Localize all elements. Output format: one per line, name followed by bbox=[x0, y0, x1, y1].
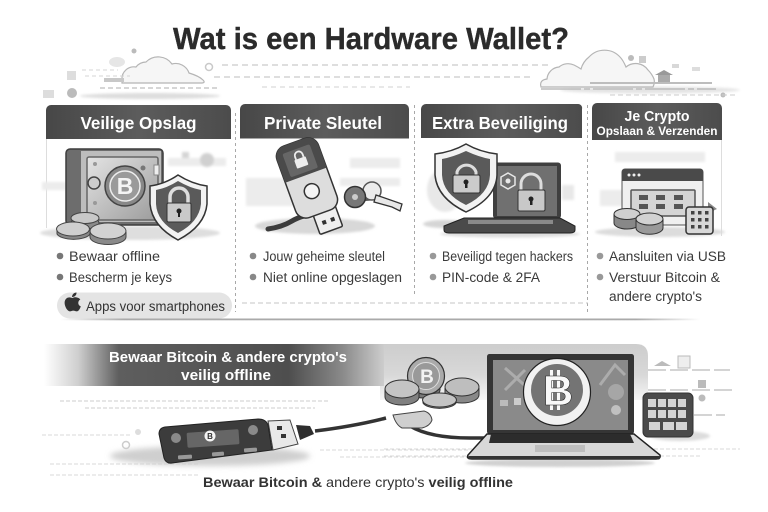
panel 4 bullets bbox=[597, 249, 726, 304]
icon: hardware key device bbox=[273, 135, 343, 235]
icon: shield with lock bbox=[435, 144, 497, 212]
panel 3 header bbox=[421, 104, 582, 138]
panel 3 header: Extra Beveiliging bbox=[432, 113, 568, 133]
icon: safe with bitcoin bbox=[66, 149, 163, 225]
icon: key cable bbox=[268, 212, 322, 229]
decoration: dashed lines under title bbox=[214, 65, 548, 87]
panel 3 bullets: Beveiligd tegen hackers bbox=[442, 249, 573, 264]
panel 2 bullets: Niet online opgeslagen bbox=[263, 270, 402, 285]
panel 1 bullets: Bescherm je keys bbox=[69, 270, 172, 285]
panel 4 header: Opslaan & Verzenden bbox=[596, 124, 718, 138]
laptop shadow bbox=[465, 459, 655, 467]
icon: laptop with lock bbox=[444, 162, 575, 233]
icon: coins bbox=[56, 212, 126, 245]
bottom background decoration bbox=[42, 356, 740, 475]
panel: Private Sleutel bbox=[240, 104, 409, 285]
panel 2 bullets: Jouw geheime sleutel bbox=[263, 249, 385, 264]
USB cable bbox=[315, 418, 484, 438]
icon: hardware wallet USB stick bbox=[159, 419, 314, 463]
panel 2 background decoration bbox=[246, 158, 400, 234]
panel: Veilige Opslag bbox=[40, 105, 232, 318]
decoration: right clouds bbox=[541, 50, 740, 98]
panel 2 bullets bbox=[250, 249, 402, 285]
banner: Bewaar Bitcoin & andere crypto's veilig offline bbox=[44, 344, 648, 400]
panel dividers bbox=[236, 105, 588, 312]
icon: coin stacks bbox=[614, 208, 663, 234]
icon: coins pile bbox=[385, 358, 479, 408]
panel 1 background decoration bbox=[40, 152, 226, 240]
panel 4 header: Je Crypto bbox=[624, 109, 690, 125]
panel: Je Crypto Opslaan & Verzenden bbox=[592, 103, 726, 304]
panel 3 background decoration bbox=[423, 168, 580, 238]
icon: apple bbox=[65, 292, 81, 311]
icon: USB connector bbox=[393, 411, 432, 428]
icon: coins pile: B bbox=[420, 367, 434, 388]
pill: Apps voor smartphones bbox=[57, 292, 232, 318]
icon: keypad with arrow bbox=[686, 202, 717, 234]
title: Wat is een Hardware Wallet? bbox=[173, 21, 569, 56]
panel 1 header: Veilige Opslag bbox=[80, 113, 196, 133]
icon: laptop with bitcoin bbox=[468, 354, 660, 460]
panel 4 bullets: Aansluiten via USB bbox=[609, 249, 726, 264]
icon: keys bbox=[344, 182, 402, 211]
panel 4 background decoration bbox=[595, 152, 725, 237]
icon: hardware wallet USB stick: B bbox=[207, 432, 213, 441]
banner: Bewaar Bitcoin & andere crypto's veilig offline: veilig offline bbox=[181, 368, 271, 384]
bottom caption: Bewaar Bitcoin & andere crypto's veilig offline bbox=[203, 474, 513, 490]
panel 1 bullets bbox=[57, 249, 172, 285]
icon: safe with bitcoin: B bbox=[117, 173, 133, 199]
icon: browser window bbox=[622, 169, 703, 225]
pill: Apps voor smartphones: Apps voor smartphones bbox=[86, 299, 225, 314]
panel 1 bullets: Bewaar offline bbox=[69, 249, 160, 264]
decoration: left clouds bbox=[43, 48, 220, 99]
banner: Bewaar Bitcoin & andere crypto's veilig offline: Bewaar Bitcoin & andere crypto's bbox=[109, 350, 347, 366]
panel 4 bullets: andere crypto's bbox=[609, 289, 702, 304]
icon: laptop with bitcoin: B bbox=[543, 367, 573, 414]
panel 4 bullets: Verstuur Bitcoin & bbox=[609, 270, 720, 285]
panel 1 header bbox=[46, 105, 231, 139]
panel: Extra Beveiliging bbox=[421, 104, 582, 285]
panel 2 header: Private Sleutel bbox=[264, 113, 382, 133]
device shadow bbox=[110, 446, 310, 466]
icon: keypad bbox=[643, 393, 710, 441]
panel 2 header bbox=[240, 104, 409, 138]
panel 3 bullets bbox=[430, 249, 573, 285]
panel 3 bullets: PIN-code & 2FA bbox=[442, 270, 540, 285]
icon: shield with lock bbox=[150, 175, 207, 240]
panel 4 header bbox=[592, 103, 722, 140]
